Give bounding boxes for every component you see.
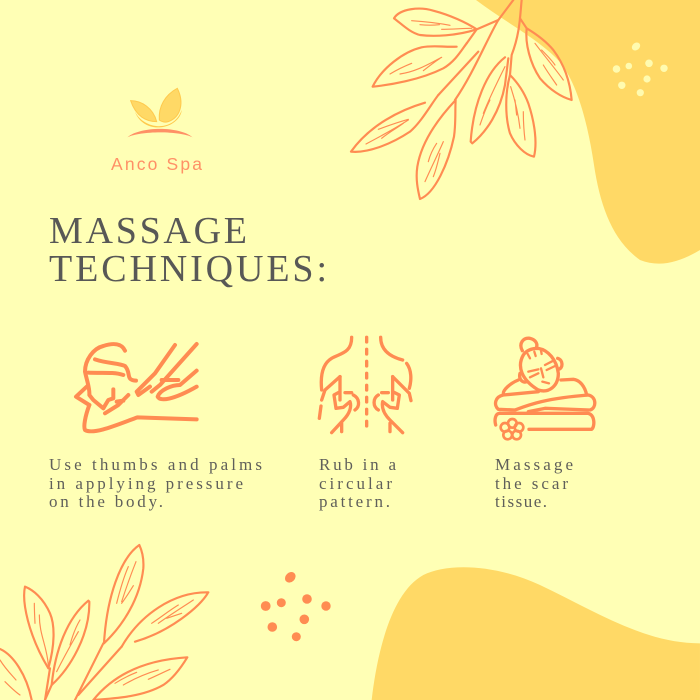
title: MASSAGE — [49, 210, 247, 252]
icon: massage hands on back — [76, 344, 197, 431]
caption: technique 2: Rub in a — [319, 455, 396, 474]
caption: technique 3: the scar — [495, 474, 568, 493]
blob: top right — [476, 0, 700, 264]
caption: technique 1: on the body. — [49, 492, 163, 511]
decoration: bottom dots — [261, 570, 331, 641]
caption: technique 1: in applying pressure — [49, 474, 243, 493]
decoration: top dots — [613, 41, 668, 96]
icon: back massage — [319, 337, 411, 433]
icon: woman resting on towels — [495, 338, 595, 439]
logo: leaves and arc — [127, 88, 193, 137]
caption: technique 2: circular — [319, 474, 392, 493]
caption: technique 1: Use thumbs and palms — [49, 455, 262, 474]
illustration: bottom leaf branch — [0, 545, 208, 700]
caption: technique 1 — [49, 455, 262, 511]
title: TECHNIQUES: — [49, 248, 327, 290]
caption: technique 3: Massage — [495, 455, 573, 474]
caption: technique 3 — [495, 455, 573, 511]
brand name: Anco Spa — [111, 154, 202, 174]
caption: technique 2 — [319, 455, 396, 511]
title — [49, 210, 327, 290]
caption: technique 2: pattern. — [319, 492, 390, 511]
caption: technique 3: tissue. — [495, 492, 547, 511]
illustration: top leaf branch — [351, 0, 572, 199]
blob: bottom right — [372, 567, 700, 700]
